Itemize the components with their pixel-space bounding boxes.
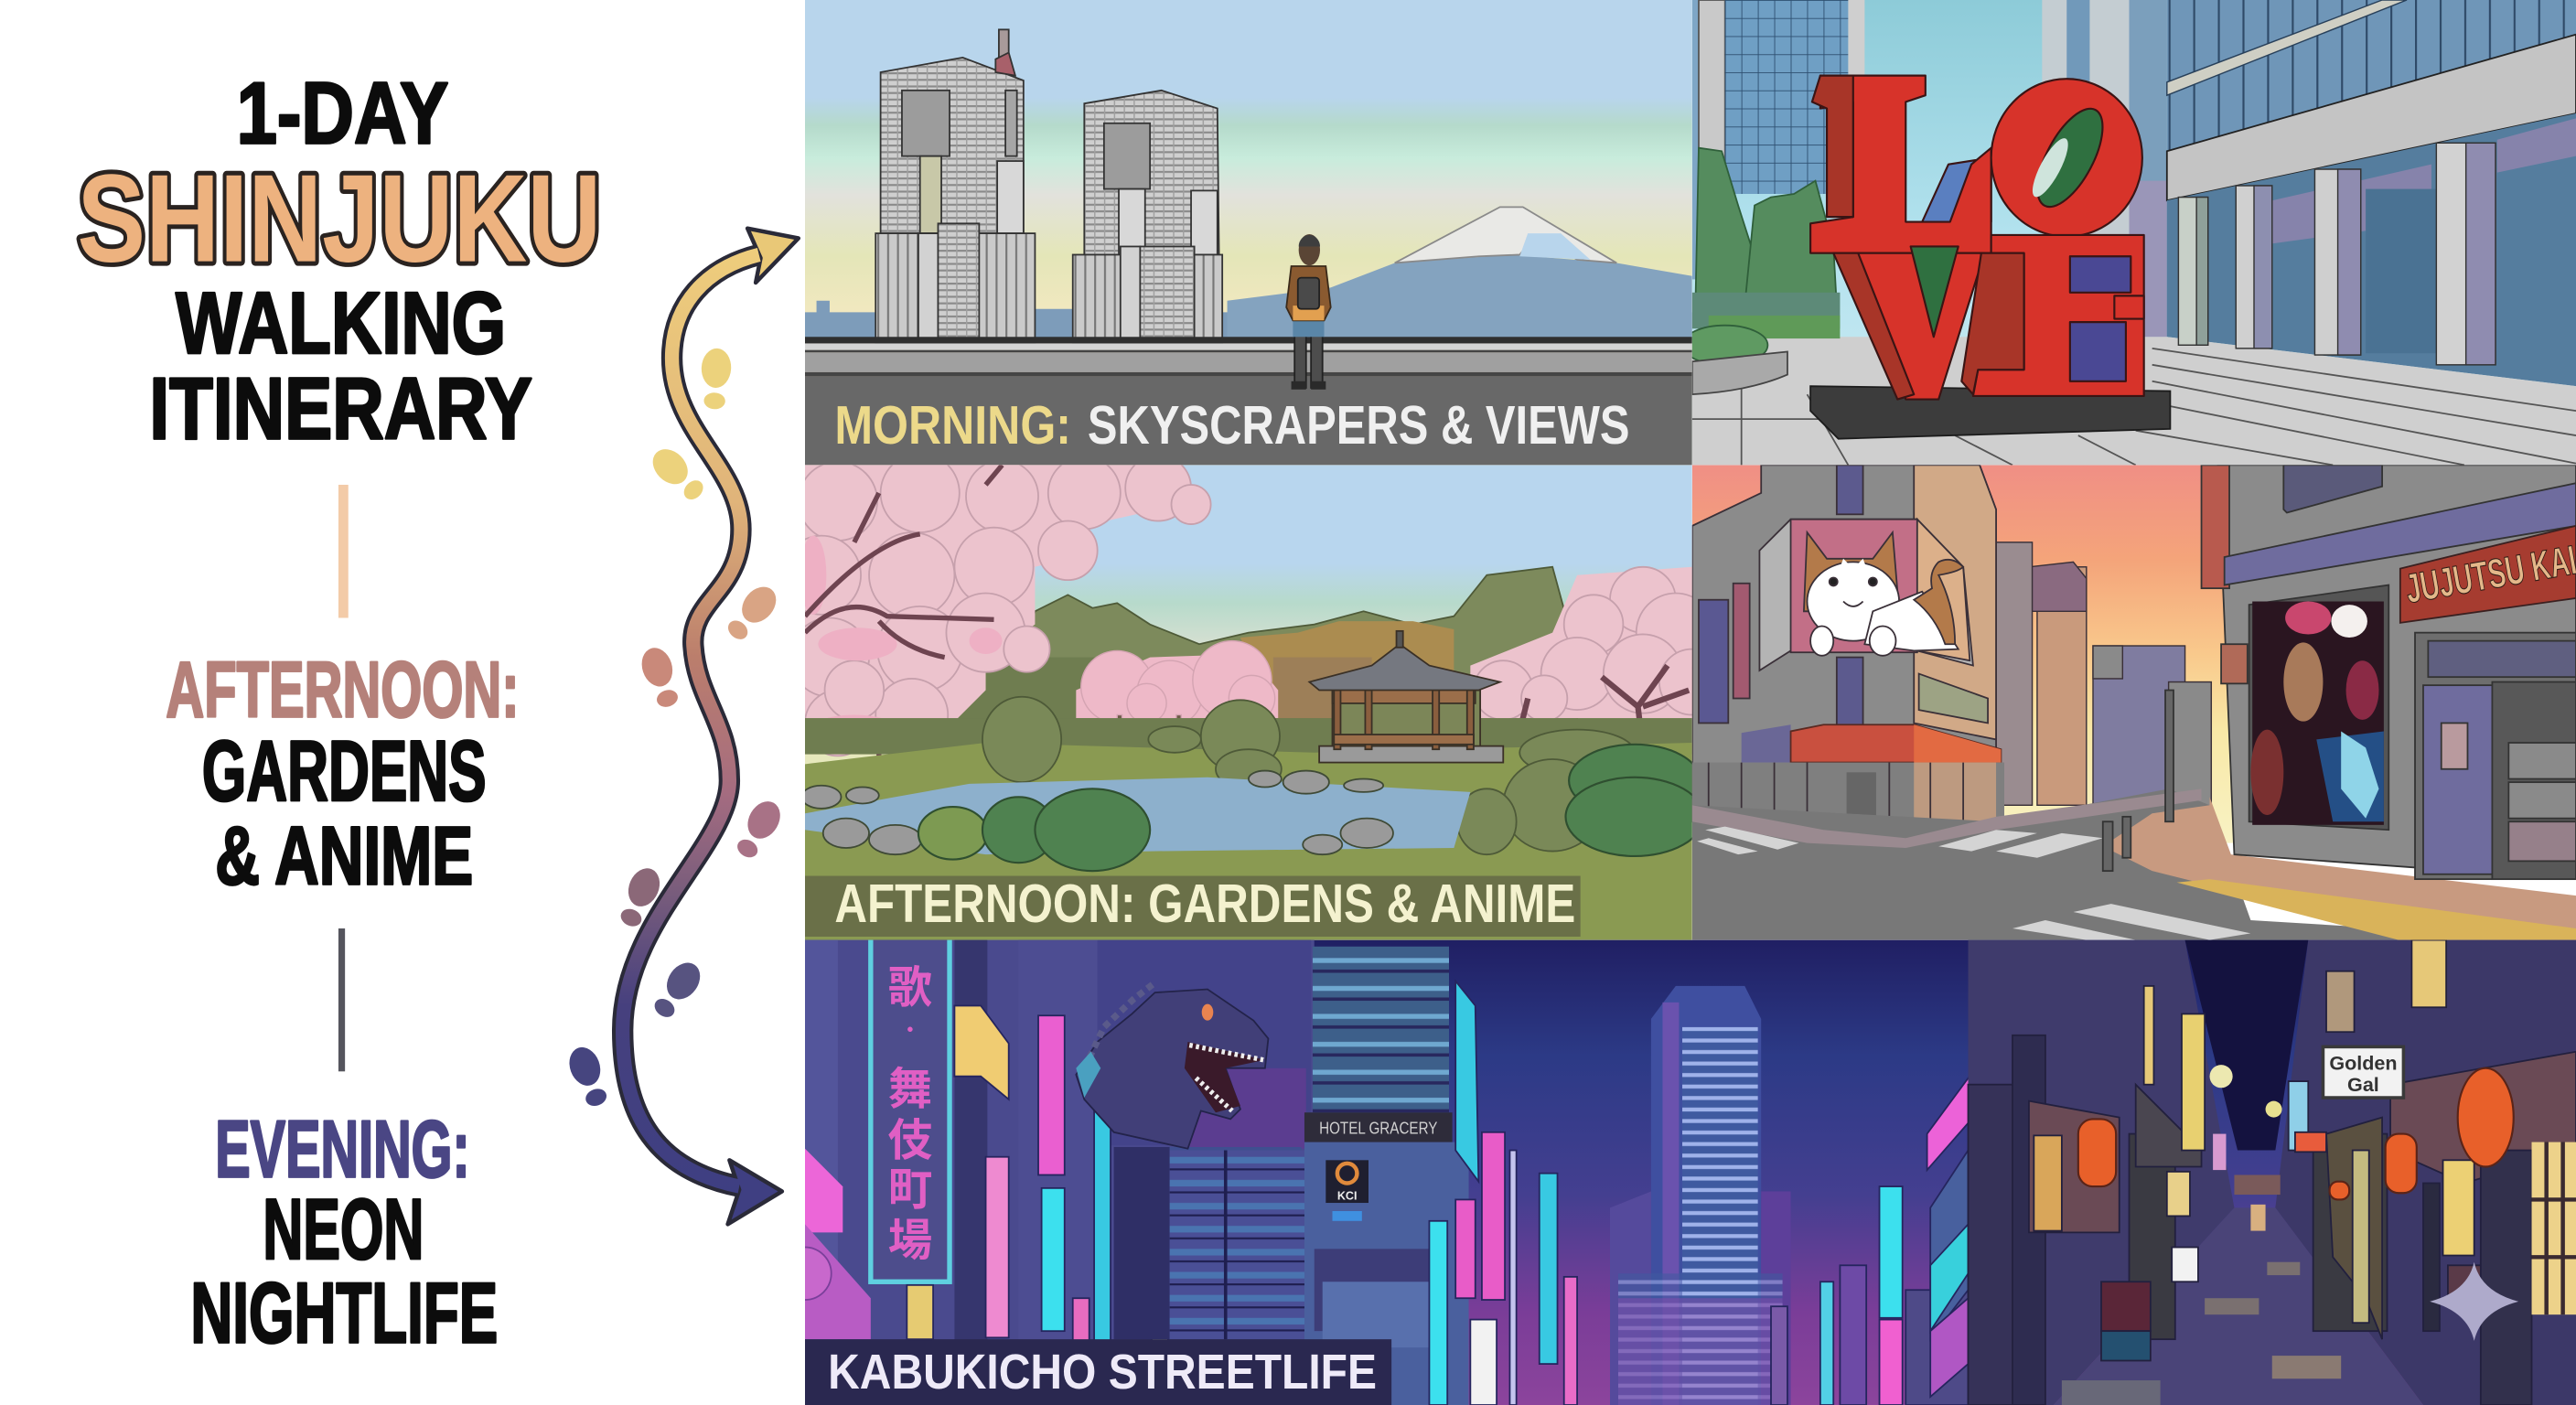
caption band: kabukicho: [805, 1339, 1391, 1405]
icon: hotel logo: [1326, 1160, 1368, 1221]
caption band: afternoon: [805, 876, 1581, 937]
road: [1692, 788, 2576, 940]
icon: pink diagonal facade: [778, 1149, 871, 1339]
icon: small cherry trees: [1076, 640, 1279, 719]
heading: afternoon: AFTERNOON:: [166, 646, 520, 734]
building: right of skyline: [1840, 1071, 1973, 1405]
caption: morning skyscrapers and views: MORNING:: [834, 394, 1071, 456]
alley: pavement: [2054, 1207, 2423, 1405]
alley: right wall: [2275, 940, 2576, 1405]
icon: Mount Fuji: [1228, 207, 1692, 340]
heading: evening: EVENING:: [215, 1103, 470, 1194]
alley: left storefronts: [1969, 986, 2205, 1405]
icon: crosswalk stripes: [1697, 827, 2250, 940]
caption: morning skyscrapers and views: [838, 405, 1628, 445]
icon: Godzilla head: [1076, 982, 1268, 1149]
icon: tactile paving strip: [2177, 879, 2576, 940]
alley: small distant lights: [2210, 1065, 2282, 1231]
icon: trees and planter: [1682, 148, 1840, 394]
icon: vertical kanji sign: 舞: [888, 1065, 932, 1114]
icon: vertical kanji sign: ・: [900, 1019, 920, 1042]
icon: central skyscraper: [1610, 986, 1791, 1405]
icon: government tower two: [1073, 91, 1222, 343]
icon: right tree trunk: [1520, 664, 1690, 719]
divider: afternoon to evening: [338, 928, 345, 1071]
icon: bollards and pole: [2103, 691, 2174, 871]
icon: background hills and foliage: [958, 565, 1578, 719]
icon: neon window strips center: [1429, 981, 1903, 1405]
icon: vertical kanji sign: [871, 937, 950, 1282]
icon: rocks: [801, 771, 1393, 854]
icon: vertical kanji sign: 場: [888, 1217, 932, 1266]
sign: Golden Gal: Golden: [2329, 1052, 2398, 1075]
icon: pond: [805, 778, 1470, 854]
caption: morning skyscrapers and views: SKYSCRAPERS & VIEWS: [1088, 394, 1630, 456]
text: and anime: & ANIME: [215, 810, 473, 903]
alley: night sky gap: [2185, 940, 2308, 1151]
walking route arrow with gradient: [623, 229, 799, 1224]
icon: vertical kanji sign: 伎: [888, 1116, 932, 1165]
icon: pavilion: [1309, 631, 1503, 763]
icon: LOVE sculpture: [1810, 76, 2144, 400]
panel: anime street crossing: [1692, 465, 2576, 940]
divider: morning to afternoon: [338, 485, 349, 617]
panel: evening neon nightlife: [778, 937, 2576, 1405]
icon: right cherry tree: [1470, 565, 1692, 719]
icon: front bushes: [918, 745, 1703, 871]
alley: paving light patches: [2062, 1262, 2341, 1405]
roof wall: [805, 337, 1692, 376]
shrub hedge band: [805, 718, 1692, 755]
icon: shop door and display: [2415, 633, 2576, 879]
icon: hotel building: [1304, 947, 1469, 1405]
icon: anime poster: [2249, 585, 2388, 830]
lawn: [805, 743, 1692, 940]
building: far street blocks: [1996, 542, 2211, 810]
building: right glass facade: [2167, 0, 2576, 386]
building: shopfronts: [1692, 763, 2004, 821]
icon: hotel logo: KCI: [1337, 1189, 1357, 1202]
title: 1-DAY: 1-DAY: [237, 65, 448, 162]
icon: vertical kanji sign: 町: [888, 1165, 932, 1215]
deep pink blossom patches: [805, 536, 1003, 718]
text: nightlife: NIGHTLIFE: [190, 1265, 498, 1361]
building: corner block with cat screen: [1692, 465, 1996, 821]
left column: title and schedule: [77, 65, 601, 1361]
caption band: morning: [805, 376, 1692, 465]
hotel sign: HOTEL GRACERY: [1319, 1119, 1438, 1138]
panel: love sculpture: [1682, 0, 2576, 465]
panel: morning skyscrapers and views: [805, 0, 1692, 465]
alley: left wall: [1969, 940, 2234, 1405]
caption: Kabukicho streetlife: KABUKICHO STREETLIFE: [828, 1345, 1377, 1400]
building: central column: [2042, 0, 2167, 337]
building: left glass tower: [1692, 0, 1864, 279]
sidewalk left: [1692, 788, 2202, 848]
icon: left cherry tree: [782, 454, 1211, 756]
building: pillars: [2178, 143, 2496, 365]
icon: government tower one: [875, 29, 1035, 343]
building: right shop: [2202, 465, 2576, 879]
icon: person with backpack: [1286, 234, 1331, 390]
building: left neon block: [805, 940, 1315, 1405]
icon: left tree branches: [805, 465, 1003, 764]
icon: red awning: [1742, 724, 2001, 763]
icon: paper lanterns: [2078, 1068, 2514, 1199]
sign: Golden Gal: [2323, 1046, 2403, 1098]
sign: Golden Gal: Gal: [2347, 1073, 2379, 1096]
icon: sparkle watermark: [2430, 1262, 2518, 1341]
title: ITINERARY: ITINERARY: [149, 361, 532, 458]
alley: right storefronts: [2289, 940, 2576, 1405]
title: WALKING: WALKING: [176, 275, 506, 372]
icon: neon window strips left: [907, 1005, 1168, 1343]
icon: vertical kanji sign: 歌: [888, 963, 932, 1013]
icon: mid bushes: [982, 697, 1635, 854]
floor: paved plaza: [1692, 337, 2576, 465]
text: gardens: GARDENS: [202, 723, 487, 819]
sidewalk right: [2103, 797, 2576, 940]
title: SHINJUKU: SHINJUKU: [77, 148, 601, 288]
icon: cat billboard: [1759, 520, 1973, 670]
footprints along the route: [564, 348, 787, 1110]
icon: sculpture base: [1810, 386, 2170, 439]
icon: lattice window: [2532, 1142, 2576, 1314]
hotel sign: [1304, 1112, 1453, 1142]
building: striped office under Godzilla: [1114, 1147, 1315, 1339]
caption: afternoon gardens and anime: AFTERNOON: GARDENS & ANIME: [834, 873, 1575, 934]
text: neon: NEON: [263, 1181, 424, 1277]
icon: distant city: [805, 301, 1692, 340]
panel: afternoon gardens: [782, 454, 1725, 940]
